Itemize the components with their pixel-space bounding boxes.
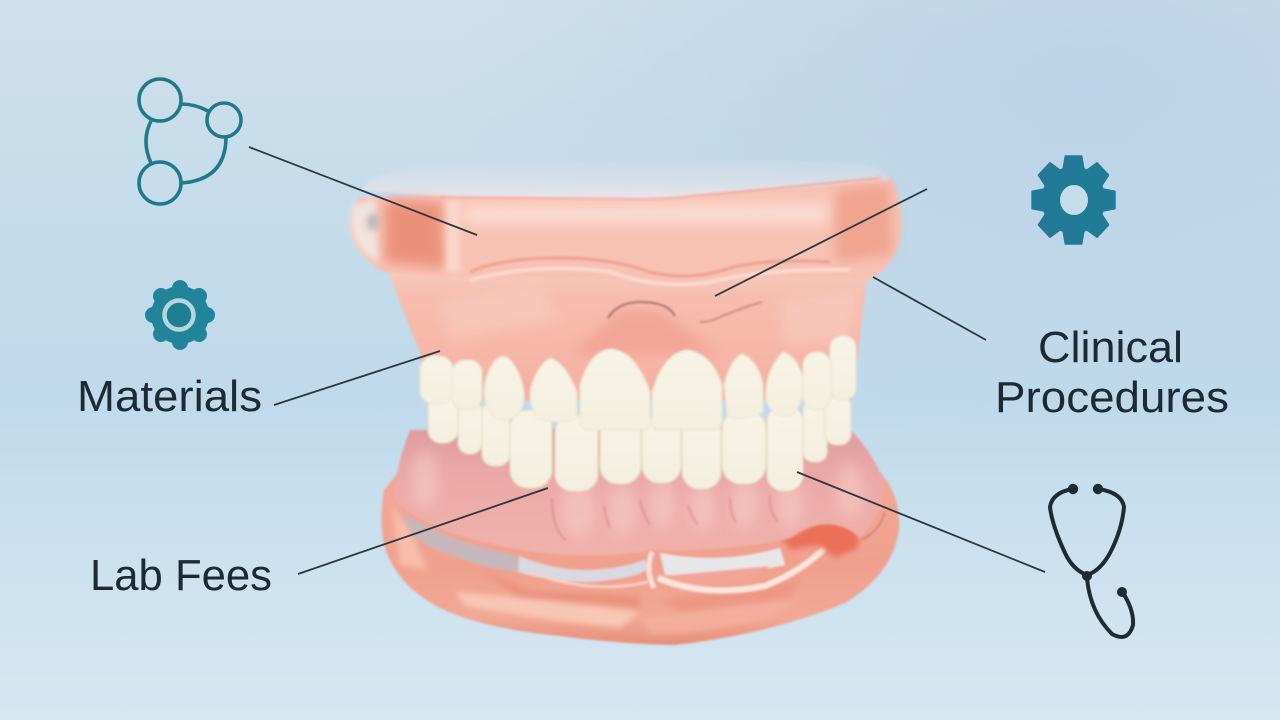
- gum right edge line: [862, 512, 885, 540]
- lower gum root ridges: [552, 495, 778, 540]
- label: Clinical Procedures: Clinical: [1038, 323, 1183, 372]
- leader line: lab fees: [298, 488, 548, 574]
- icon: small gear: [145, 280, 215, 350]
- label: Materials: Materials: [77, 372, 262, 421]
- upper gum: [388, 262, 870, 400]
- left clear corner: [351, 200, 380, 262]
- tray edge line: [440, 178, 880, 199]
- icon: connected nodes: [139, 79, 241, 204]
- upper base shading: [385, 183, 892, 355]
- lower base: [382, 470, 899, 645]
- leader line: clinical procedures: [873, 277, 986, 340]
- upper base: [350, 178, 902, 285]
- lower base highlights: [392, 505, 800, 634]
- lower gum: [394, 425, 884, 556]
- lower gum root highlights: [411, 450, 864, 538]
- label: Clinical Procedures: [995, 323, 1229, 422]
- icon: stethoscope: [1050, 486, 1133, 637]
- icon: large gear: [1032, 156, 1115, 244]
- leader line: icon network to upper base: [249, 147, 477, 235]
- lower clear tray windows: [402, 512, 825, 590]
- frenum notch lines: [608, 302, 675, 318]
- lower teeth: [428, 395, 851, 491]
- label: Clinical Procedures: Procedures: [995, 373, 1229, 422]
- label: Lab Fees: Lab Fees: [90, 551, 272, 600]
- upper flange ridge: [470, 258, 830, 276]
- clear top tray: [362, 160, 890, 198]
- leader line: gear to upper gum: [715, 189, 927, 296]
- leader line: materials: [274, 351, 440, 405]
- upper teeth: [420, 336, 856, 430]
- denture model photo: [350, 160, 902, 645]
- leader line: stethoscope: [797, 472, 1045, 572]
- red spot: [782, 522, 860, 558]
- pale vertical band: [446, 200, 460, 272]
